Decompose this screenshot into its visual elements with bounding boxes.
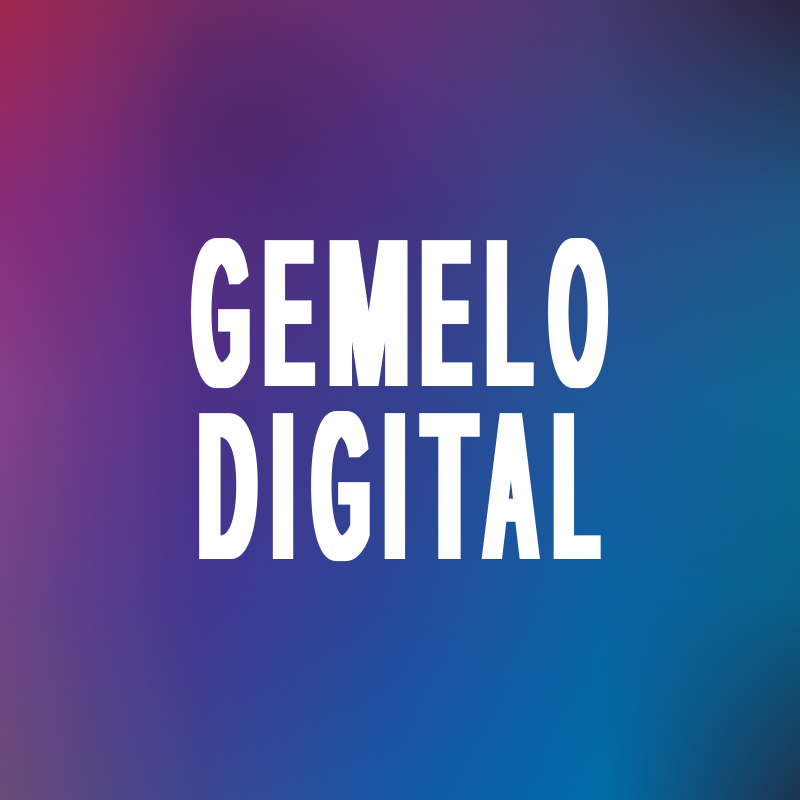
title line: GEMELO: ELO bbox=[422, 195, 606, 432]
title line: DIGITAL: AL bbox=[485, 368, 598, 605]
title line: DIGITAL: T bbox=[423, 368, 476, 605]
title line: DIGITAL: IGI bbox=[273, 368, 405, 605]
title bbox=[193, 195, 606, 605]
title line: GEMELO: GE bbox=[193, 195, 313, 432]
title line: GEMELO: M bbox=[328, 195, 409, 432]
title line: DIGITAL: D bbox=[199, 368, 256, 605]
